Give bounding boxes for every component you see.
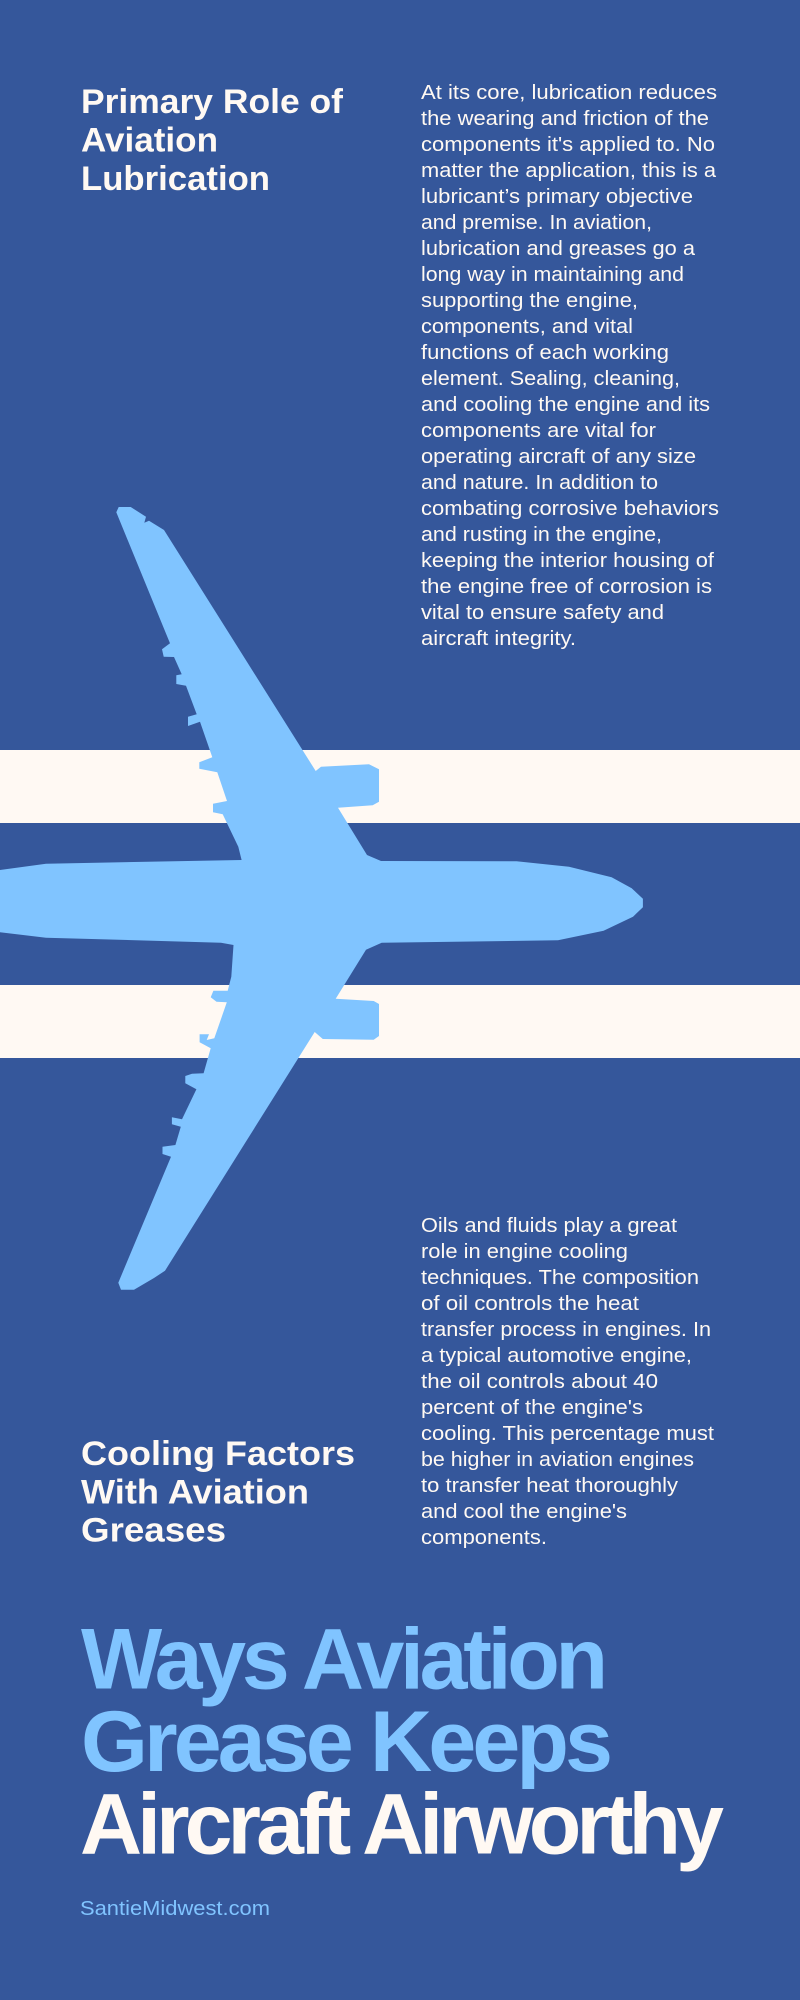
- text block: primary role body: functions of each working: [421, 342, 669, 364]
- text block: primary role body: matter the application, this is a: [421, 160, 717, 182]
- heading: Cooling Factors With Aviation Greases: Cooling Factors: [81, 1435, 355, 1473]
- title: [80, 1612, 724, 1872]
- text block: primary role body: vital to ensure safety and: [421, 602, 664, 624]
- title: Ways Aviation: [81, 1612, 608, 1708]
- heading: Primary Role of Aviation Lubrication: Lubrication: [81, 160, 270, 198]
- text block: cooling factors body: transfer process in engines. In: [421, 1319, 711, 1341]
- title: Aircraft Airworthy: [80, 1776, 724, 1872]
- text block: primary role body: lubricant’s primary objective: [421, 186, 693, 208]
- heading: Cooling Factors With Aviation Greases: With Aviation: [81, 1473, 309, 1511]
- text block: primary role body: [421, 82, 719, 650]
- icon: airplane silhouette: [0, 507, 643, 1290]
- text block: primary role body: the engine free of corrosion is: [421, 576, 712, 598]
- text block: cooling factors body: percent of the engine's: [421, 1397, 643, 1419]
- text block: cooling factors body: [421, 1215, 714, 1549]
- heading: Primary Role of Aviation Lubrication: Aviation: [81, 122, 218, 160]
- text block: primary role body: and premise. In aviation,: [421, 212, 652, 234]
- text block: primary role body: combating corrosive behaviors: [421, 498, 719, 520]
- text block: primary role body: and nature. In addition to: [421, 472, 658, 494]
- text block: primary role body: components, and vital: [421, 316, 633, 338]
- text block: cooling factors body: Oils and fluids play a great: [421, 1215, 677, 1237]
- text block: primary role body: operating aircraft of any size: [421, 446, 696, 468]
- text block: primary role body: At its core, lubrication reduces: [421, 82, 717, 104]
- text block: cooling factors body: to transfer heat thoroughly: [421, 1475, 678, 1497]
- text block: primary role body: aircraft integrity.: [421, 628, 576, 650]
- heading: Primary Role of Aviation Lubrication: [81, 83, 344, 198]
- text block: cooling factors body: cooling. This percentage must: [421, 1423, 714, 1445]
- text block: cooling factors body: techniques. The composition: [421, 1267, 699, 1289]
- text block: primary role body: the wearing and friction of the: [421, 108, 709, 130]
- text block: cooling factors body: a typical automotive engine,: [421, 1345, 692, 1367]
- text block: primary role body: and rusting in the engine,: [421, 524, 662, 546]
- upper cream band: [0, 750, 800, 823]
- heading: Cooling Factors With Aviation Greases: [81, 1435, 355, 1550]
- source: website URL: SantieMidwest.com: [80, 1898, 270, 1920]
- text block: primary role body: and cooling the engine and its: [421, 394, 710, 416]
- text block: primary role body: supporting the engine,: [421, 290, 638, 312]
- text block: cooling factors body: and cool the engine's: [421, 1501, 627, 1523]
- text block: cooling factors body: role in engine cooling: [421, 1241, 628, 1263]
- lower cream band: [0, 985, 800, 1058]
- text block: cooling factors body: the oil controls about 40: [421, 1371, 658, 1393]
- text block: primary role body: lubrication and greases go a: [421, 238, 696, 260]
- text block: cooling factors body: components.: [421, 1527, 547, 1549]
- text block: primary role body: components are vital for: [421, 420, 656, 442]
- text block: cooling factors body: of oil controls the heat: [421, 1293, 639, 1315]
- heading: Cooling Factors With Aviation Greases: Greases: [81, 1512, 226, 1550]
- text block: cooling factors body: be higher in aviation engines: [421, 1449, 694, 1471]
- text block: primary role body: keeping the interior housing of: [421, 550, 714, 572]
- text block: primary role body: long way in maintaining and: [421, 264, 684, 286]
- title: Grease Keeps: [81, 1694, 613, 1790]
- text block: primary role body: components it's applied to. No: [421, 134, 715, 156]
- heading: Primary Role of Aviation Lubrication: Primary Role of: [81, 83, 344, 121]
- text block: primary role body: element. Sealing, cleaning,: [421, 368, 680, 390]
